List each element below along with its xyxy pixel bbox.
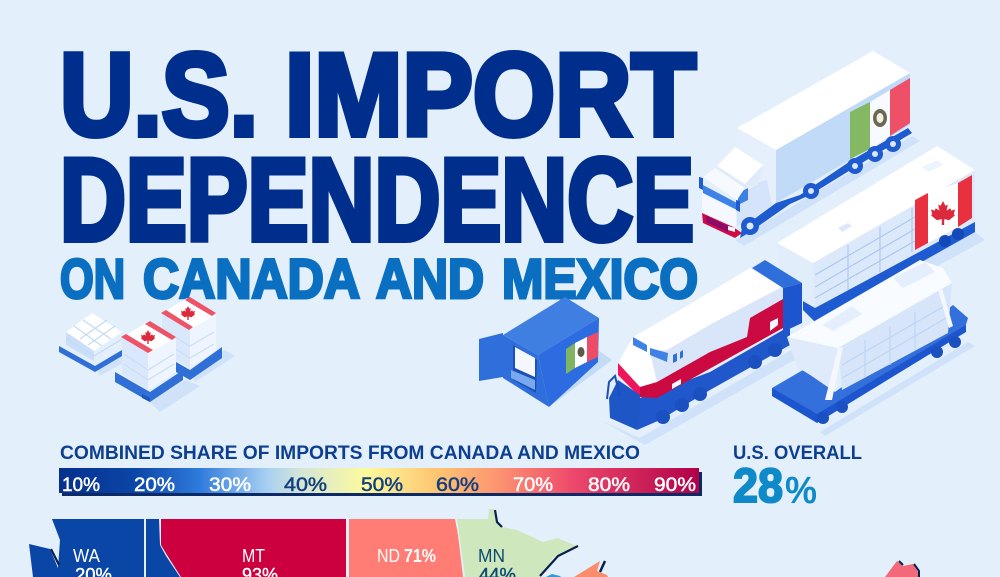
cab block xyxy=(752,260,802,288)
state: Michigan xyxy=(574,561,608,577)
legend bar: 70% xyxy=(513,474,553,496)
legend bar: 40% xyxy=(284,474,327,496)
windows xyxy=(633,337,647,352)
cab xyxy=(699,147,772,238)
title xyxy=(60,29,696,265)
icon: locomotive xyxy=(600,260,812,445)
icon: bags on pallet xyxy=(59,313,135,376)
legend bar xyxy=(59,468,702,496)
front block xyxy=(609,380,640,430)
U.S. overall label: U.S. OVERALL xyxy=(733,443,862,464)
legend bar: 80% xyxy=(588,474,630,496)
legend bar: 30% xyxy=(209,474,251,496)
trailer xyxy=(737,51,910,203)
hood top xyxy=(633,268,782,352)
icon: Canadian pallet front xyxy=(115,321,200,412)
state: Minnesota xyxy=(457,509,578,577)
legend bar: 90% xyxy=(654,474,696,496)
state: Washington xyxy=(29,519,144,577)
subtitle: ON xyxy=(60,247,125,310)
U.S. overall value: 28 xyxy=(733,460,783,513)
state: Idaho xyxy=(146,519,180,577)
state: Maine xyxy=(885,561,919,577)
state: Montana xyxy=(161,519,346,577)
undercarriage xyxy=(637,326,790,430)
icon: hopper car xyxy=(772,260,975,436)
state: North Dakota xyxy=(349,519,463,577)
subtitle: MEXICO xyxy=(502,247,698,310)
icon: Canadian pallet back xyxy=(161,297,235,382)
subtitle: AND xyxy=(376,247,484,310)
U.S. overall value: % xyxy=(785,470,817,512)
title: IMPORT xyxy=(285,29,696,160)
state: Montana: MT xyxy=(242,546,265,566)
state: North Dakota: ND xyxy=(377,546,400,566)
hood side xyxy=(640,268,783,387)
state: Washington: WA xyxy=(73,546,100,566)
state: Wisconsin xyxy=(546,574,561,577)
state: North Dakota: 71% xyxy=(404,546,436,566)
icon: shipping container xyxy=(479,297,612,407)
title: U.S. xyxy=(60,29,258,160)
icon: truck with Mexican flag xyxy=(699,51,920,246)
U.S. overall value xyxy=(733,460,817,513)
red band xyxy=(640,299,783,398)
legend bar: 60% xyxy=(436,474,479,496)
subtitle xyxy=(60,247,698,310)
legend heading: COMBINED SHARE OF IMPORTS FROM CANADA AND MEXICO xyxy=(60,443,640,464)
legend bar: 50% xyxy=(361,474,403,496)
nose xyxy=(618,337,657,387)
state: Minnesota: MN xyxy=(478,546,505,566)
map of states xyxy=(29,509,919,577)
title: DEPENDENCE xyxy=(60,134,694,265)
wheels xyxy=(656,343,782,424)
legend bar: 20% xyxy=(134,474,175,496)
subtitle: CANADA xyxy=(143,247,360,310)
chassis xyxy=(740,128,912,238)
legend bar: 10% xyxy=(62,474,100,496)
icon: boxcar with Canadian flag xyxy=(777,146,985,328)
wheels xyxy=(741,136,901,235)
